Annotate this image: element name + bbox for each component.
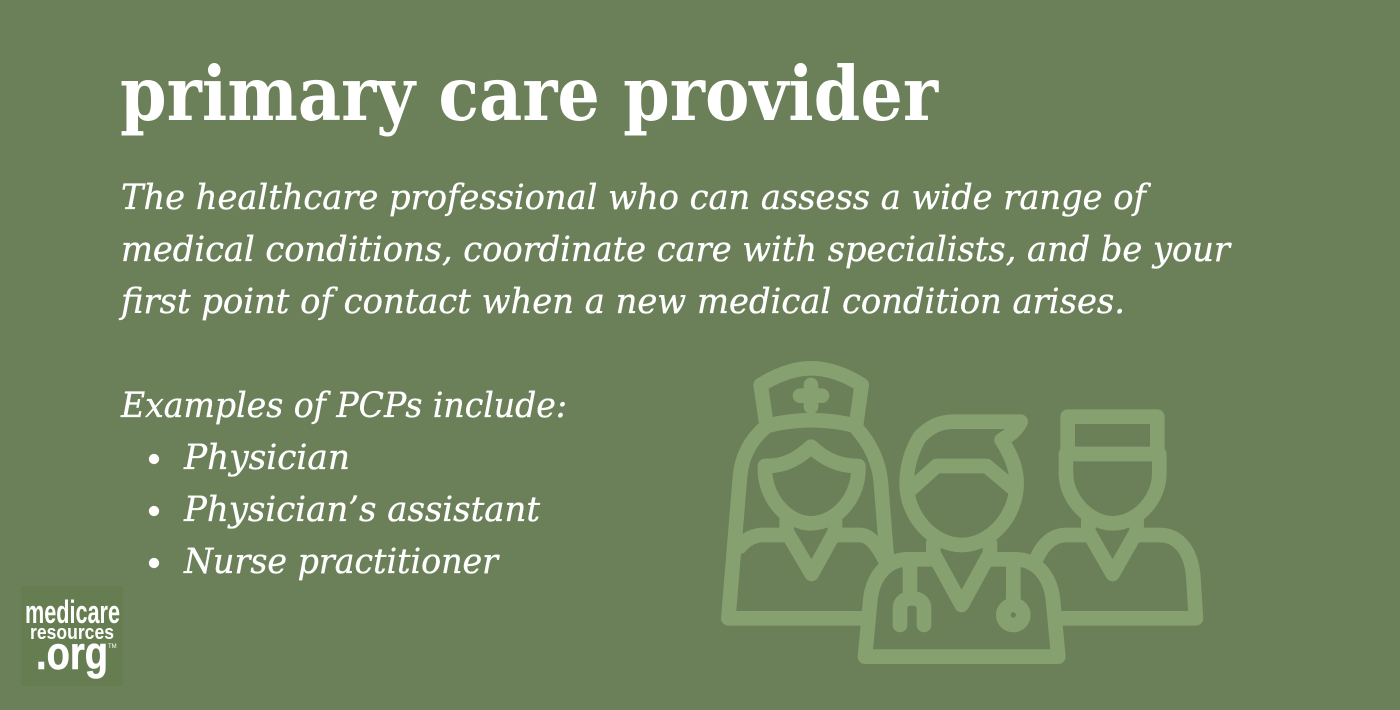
text block: definition: first point of contact when a new medical condition arises. xyxy=(118,282,1125,322)
icon: three healthcare professionals xyxy=(728,368,1196,657)
text block: examples list xyxy=(120,386,567,582)
icon: masked medic xyxy=(1037,417,1196,618)
text block: examples list: Examples of PCPs include: xyxy=(120,386,567,426)
logo: medicareresources.org xyxy=(21,586,123,686)
logo: medicareresources.org: medicare xyxy=(25,594,120,630)
text block: examples list: Physician’s assistant xyxy=(183,490,541,530)
logo: medicareresources.org: TM xyxy=(108,644,117,650)
title: primary care provider xyxy=(120,50,939,138)
text block: definition: medical conditions, coordinate care with specialists, and be your xyxy=(121,230,1232,270)
icon: nurse xyxy=(728,368,887,618)
text block: examples list: Nurse practitioner xyxy=(183,542,500,582)
logo: medicareresources.org: .org xyxy=(36,627,108,679)
text block: definition xyxy=(118,178,1232,322)
text block: definition: The healthcare professional who can assess a wide range of xyxy=(121,178,1152,218)
text block: examples list: Physician xyxy=(183,438,350,478)
icon: doctor with stethoscope xyxy=(865,422,1058,657)
logo: medicareresources.org: resources xyxy=(30,622,114,644)
